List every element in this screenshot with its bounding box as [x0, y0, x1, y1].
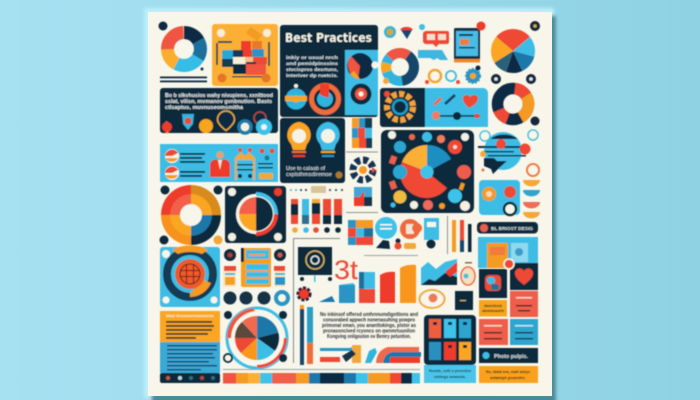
- balloon icon: [461, 262, 475, 285]
- panel: yellow process blocks: [212, 24, 278, 86]
- small stack icons: [523, 164, 540, 218]
- pie callout bubbles: [388, 131, 471, 211]
- right pie chart: [491, 21, 540, 84]
- centre text block: No inkinsof offersd umfvnnumdigottions and: [320, 312, 418, 318]
- panel: dark text with icons: [160, 88, 278, 135]
- orange caption: [479, 366, 538, 383]
- tile: swirl icon: [479, 269, 507, 298]
- cyan icon column: [345, 50, 378, 115]
- gear icon: [353, 160, 376, 180]
- centre text block: Kongving onligouton ov Bemry petuntion.: [327, 334, 412, 340]
- panel footer icons: [160, 373, 220, 383]
- circular arrows pie: [224, 308, 287, 368]
- cyan caption: Ruwds, usth a pnssntos: [429, 368, 472, 373]
- icon row: [162, 111, 272, 135]
- panel: orange bars row: [290, 186, 343, 193]
- panel: cyan people row: [160, 144, 278, 182]
- ring badge icon: [420, 290, 444, 308]
- small icons near pencils: [412, 218, 439, 248]
- red speech bubbles: [423, 31, 449, 47]
- tile: blue text: [510, 319, 538, 345]
- panel: flower and heart: [380, 88, 488, 127]
- color strip: [223, 373, 420, 384]
- tile: red note: [510, 291, 538, 317]
- dark label bar: Photo pulpis.: [494, 354, 528, 360]
- right donut chart: [498, 88, 540, 126]
- person figure: [210, 152, 230, 177]
- panel: dark text with icons: ctlsaptus, muvnuseomsmitha: [165, 105, 243, 111]
- orange caption: Ru, idstd ovs, ssdt sdsyn: [486, 369, 531, 374]
- cyan caption: urbtngs woasnts.: [434, 374, 466, 379]
- tile: heart: [510, 263, 538, 290]
- gear icon small: [298, 288, 310, 300]
- poster shadow: [152, 16, 556, 400]
- panel: cyan icon tile: [479, 180, 520, 215]
- centre text block: [320, 312, 418, 340]
- orange panel heading: Mail tnnovermaomnis: [166, 313, 215, 318]
- tile: orange note: doentcsk: [484, 304, 503, 308]
- pens: [300, 305, 313, 365]
- bar chart: [319, 265, 416, 303]
- tile: red text: [479, 319, 508, 345]
- large pie panel: [381, 130, 474, 213]
- bird and speech scene: [478, 130, 538, 174]
- panel: dark donut: [225, 186, 286, 243]
- body text: inkiy or usual nrch: [286, 55, 338, 61]
- chart axis line: [364, 255, 418, 256]
- poster glow: [144, 8, 554, 398]
- abacus figure: [235, 148, 255, 180]
- top small pins: [384, 24, 425, 39]
- centre text block: primonal xman, you ananttokings, plstor as: [322, 323, 416, 329]
- panel: globe: [160, 245, 220, 307]
- panel: blue text: [160, 342, 220, 373]
- blue speech tag: [418, 50, 448, 60]
- color blocks: [346, 118, 378, 152]
- small square icon: [346, 187, 378, 213]
- mini pies and lines: [165, 149, 205, 180]
- middle cards: [223, 248, 288, 304]
- cyan caption: [424, 365, 476, 383]
- mini pencils and vertical rule: [447, 216, 472, 254]
- horizontal rule: [223, 369, 420, 370]
- top-left donut chart: [158, 22, 207, 82]
- heading: Best Practices: [285, 31, 372, 45]
- large donut chart: [160, 185, 222, 245]
- ribbon arrows: [320, 345, 421, 363]
- small donuts: [285, 84, 338, 112]
- dark label bar: [479, 348, 538, 363]
- panel: best practices: interiver dp ruetcis.: [286, 73, 338, 79]
- tablet icon: [454, 22, 486, 62]
- tile: orange note: [479, 300, 507, 316]
- dark header pill: BL BRIOST DESIG: [491, 226, 534, 231]
- vertical rule with chart frame: [293, 238, 340, 363]
- panel text: Bo b slkvhusios wahy nivupiens, xxnlttood: [165, 93, 273, 99]
- panel: bulbs: cxplsthmsdiremse: [286, 172, 332, 178]
- small icon row: [425, 66, 480, 84]
- panel: dark text with icons: sslat, vilisn, mvmanov gvnbnution. Basts: [165, 99, 272, 105]
- poster sheet: [148, 12, 552, 396]
- top ring: [380, 47, 420, 87]
- dark small icon: [455, 291, 473, 310]
- panel: orange text: [160, 311, 220, 342]
- dark header pill: [477, 222, 538, 234]
- tile: orange note: slootonschh: [482, 309, 505, 313]
- node tree: [258, 148, 274, 179]
- panel: document tiles: [478, 237, 538, 268]
- color tile grid: [348, 220, 373, 245]
- panel: bulbs: [280, 118, 345, 183]
- orange caption: sdampt pusntin.: [490, 375, 526, 380]
- panel: best practices: and pemidpinssins: [286, 61, 338, 67]
- panel: six tiles: [424, 315, 476, 365]
- stacked bar chart: [291, 199, 342, 233]
- red badge: [504, 259, 514, 269]
- big number: 3t: [334, 255, 359, 285]
- bulb caption: Use to calaab of: [286, 166, 326, 172]
- panel: best practices: stvcispros desrtuns,: [286, 67, 339, 73]
- area chart: [421, 259, 457, 285]
- panel: best practices: [280, 25, 378, 117]
- centre text block: pronasoncived rcyoncs on qwnmrtuunilon: [323, 328, 415, 334]
- bubble and cat icons: [375, 217, 420, 250]
- centre text block: consorabed appwch nonenasuhing powpro: [323, 318, 415, 324]
